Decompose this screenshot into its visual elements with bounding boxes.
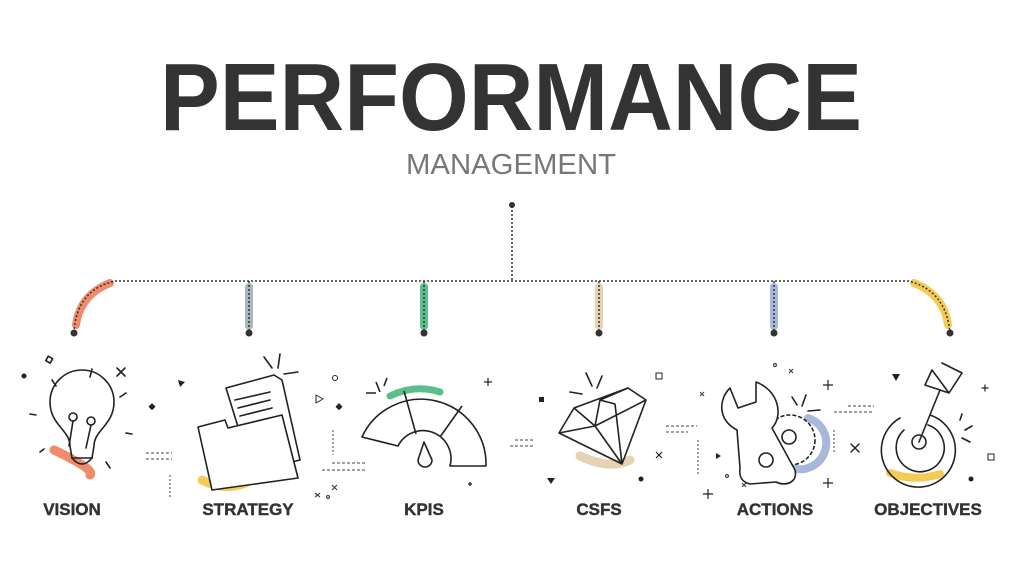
subtitle: MANAGEMENT — [406, 149, 616, 181]
icon: light bulb — [30, 356, 132, 475]
title: PERFORMANCE — [160, 44, 862, 151]
labels: VISION — [43, 500, 101, 519]
labels: STRATEGY — [202, 500, 294, 519]
icon: folder strategy — [198, 354, 300, 490]
icon: gauge KPIs — [316, 376, 492, 486]
icon: target OBJECTIVES — [851, 363, 994, 487]
connector tree — [70, 202, 954, 336]
icon: wrench and gear ACTIONS — [703, 380, 833, 499]
labels — [43, 500, 982, 519]
labels: CSFS — [576, 500, 622, 519]
labels: OBJECTIVES — [874, 500, 982, 519]
labels: KPIS — [404, 500, 444, 519]
labels: ACTIONS — [737, 500, 813, 519]
icon: diamond CSFS — [559, 373, 662, 464]
